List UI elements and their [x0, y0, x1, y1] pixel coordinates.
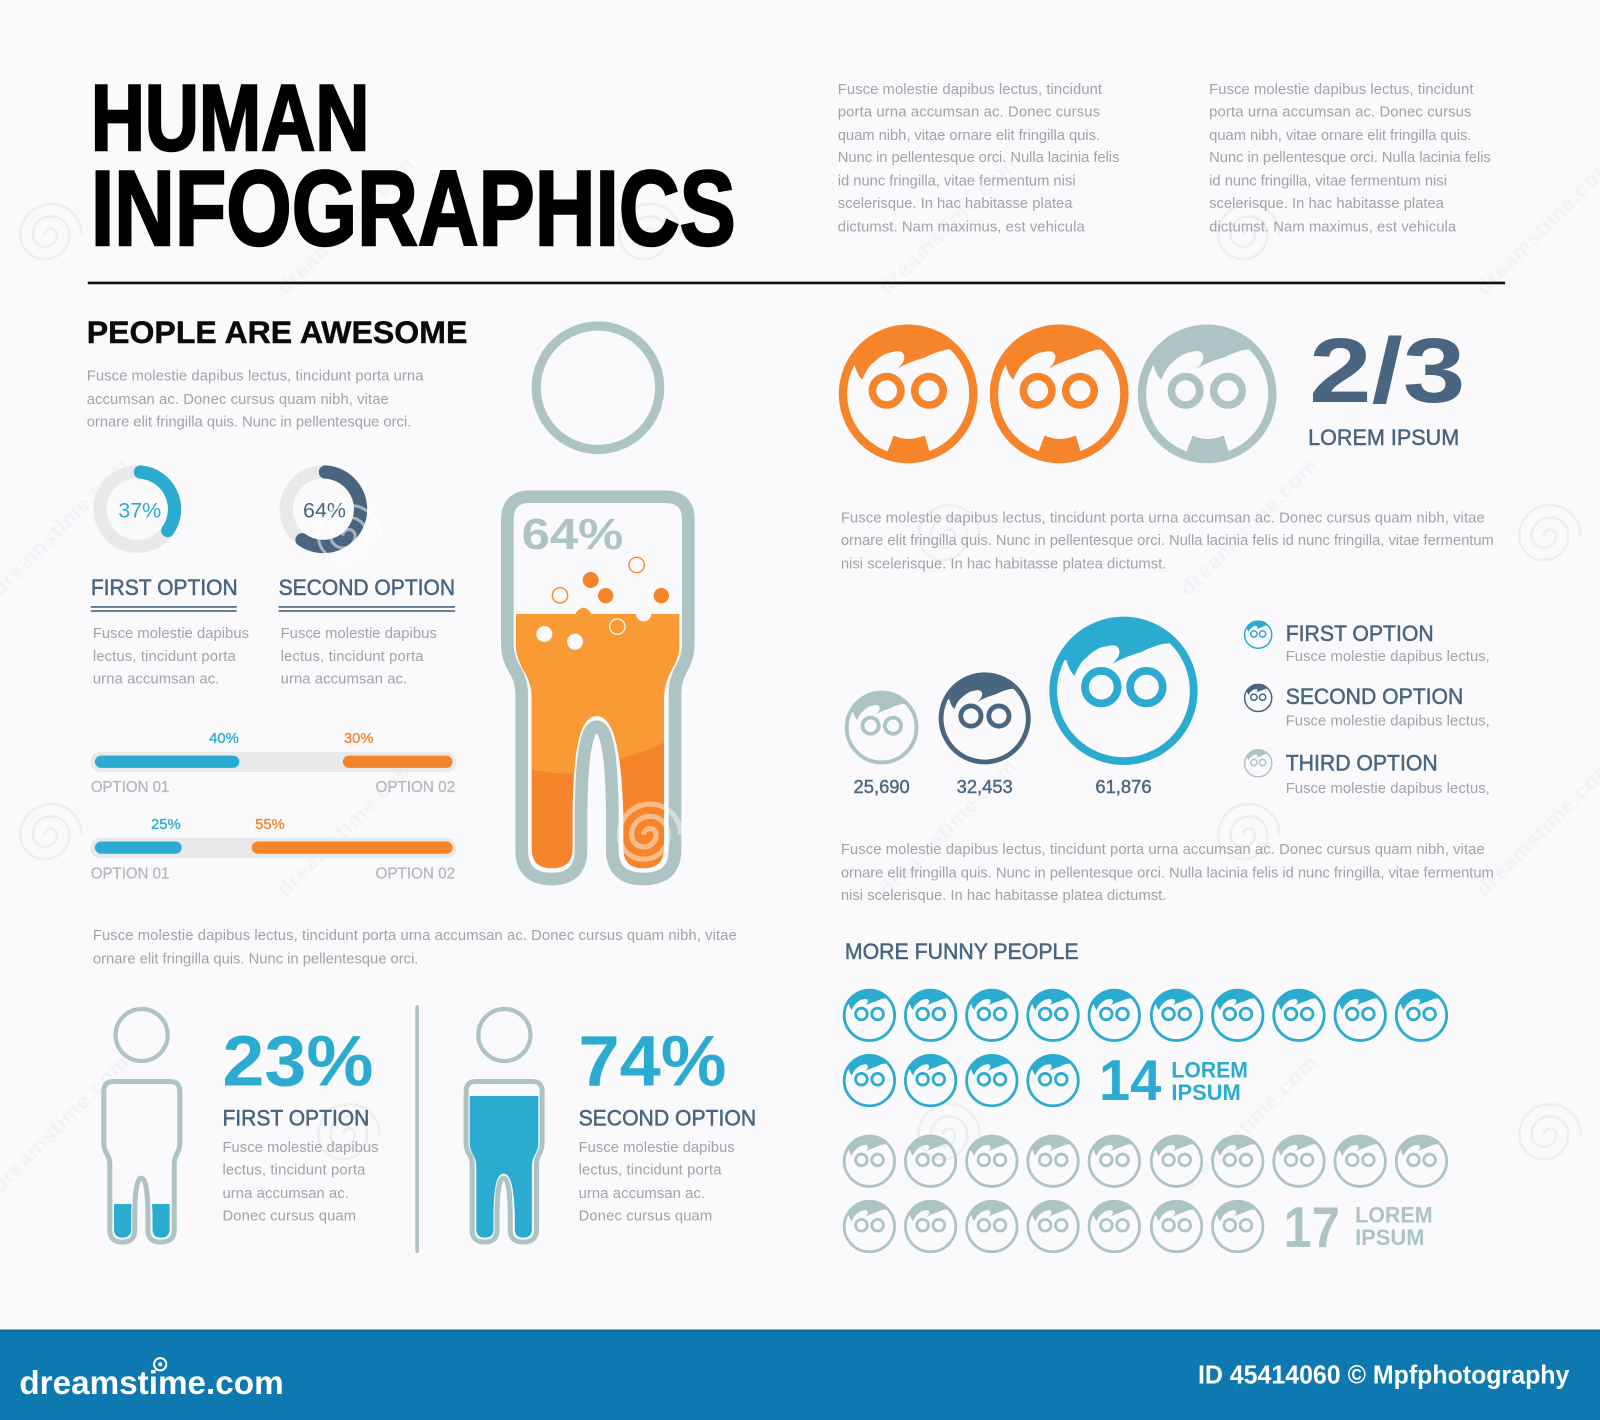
stat: 2/3 lorem ipsum: 2/3: [1309, 320, 1465, 422]
stat: 74% second option: Donec cursus quam: [579, 1208, 712, 1224]
legend: Fusce molestie dapibus lectus,: [1286, 781, 1490, 797]
legend: Fusce molestie dapibus lectus,: [1286, 714, 1490, 730]
small person 23%: [104, 1009, 180, 1242]
legend: [1245, 621, 1490, 797]
right text block 1: [841, 510, 1494, 572]
right text block 2: Fusce molestie dapibus lectus, tincidunt porta urna accumsan ac. Donec cursus quam nibh, vitae: [841, 842, 1485, 858]
bar chart 2: OPTION 02: [376, 866, 455, 883]
people text block: [87, 369, 424, 431]
stat: 14 lorem ipsum: IPSUM: [1171, 1080, 1241, 1105]
intro text column 1: id nunc fringilla, vitae fermentum nisi: [838, 174, 1076, 190]
intro text column 1: [838, 82, 1119, 236]
stat: 17 lorem ipsum: [1284, 1196, 1433, 1260]
bubble faces with counts: 32,453: [957, 776, 1013, 797]
bubble faces with counts: 25,690: [854, 776, 910, 797]
second option block: SECOND OPTION: [279, 575, 455, 600]
bar chart 1: [91, 731, 456, 796]
middle text block: [93, 928, 737, 967]
stat: 23% first option: FIRST OPTION: [222, 1106, 369, 1131]
stat: 23% first option: urna accumsan ac.: [222, 1186, 349, 1202]
intro text column 2: id nunc fringilla, vitae fermentum nisi: [1209, 174, 1447, 190]
second option block: Fusce molestie dapibus: [281, 626, 437, 642]
stat: 74% second option: Fusce molestie dapibus: [579, 1140, 735, 1156]
heading: more funny people: MORE FUNNY PEOPLE: [845, 939, 1079, 964]
intro text column 1: Nunc in pellentesque orci. Nulla lacinia felis: [838, 150, 1119, 166]
legend: Fusce molestie dapibus lectus,: [1286, 649, 1490, 665]
bar chart 2: 25%: [151, 817, 181, 833]
owl faces 2 of 3: [843, 328, 1272, 461]
bar chart 2: [91, 817, 456, 883]
first option block: FIRST OPTION: [91, 575, 238, 600]
stat: 23% first option: 23%: [222, 1022, 373, 1102]
stat: 23% first option: Donec cursus quam: [222, 1208, 356, 1224]
intro text column 1: dictumst. Nam maximus, est vehicula: [838, 220, 1085, 236]
second option block: urna accumsan ac.: [281, 672, 407, 688]
gray faces: 17: [844, 1136, 1447, 1252]
footer bar: ID 45414060 © Mpfphotography: [1198, 1362, 1570, 1390]
stat: 14 lorem ipsum: [1099, 1049, 1248, 1113]
middle text block: ornare elit fringilla quis. Nunc in pellentesque orci.: [93, 951, 418, 967]
first option block: [91, 575, 249, 688]
intro text column 2: Nunc in pellentesque orci. Nulla lacinia felis: [1209, 150, 1491, 166]
blue faces: 14: [844, 990, 1447, 1106]
stat: 17 lorem ipsum: 17: [1284, 1196, 1340, 1260]
watermark spirals and text: dreamstime.com: [874, 152, 1022, 299]
stat: 74% second option: 74%: [579, 1022, 727, 1102]
bubble faces with counts: [847, 621, 1194, 797]
bar chart 1: 30%: [344, 731, 373, 747]
people text block: Fusce molestie dapibus lectus, tincidunt porta urna: [87, 369, 424, 385]
legend: SECOND OPTION: [1286, 684, 1463, 709]
bubble faces with counts: 61,876: [1095, 776, 1152, 797]
intro text column 2: scelerisque. In hac habitasse platea: [1209, 196, 1445, 212]
footer bar: [0, 1330, 1600, 1420]
intro text column 1: Fusce molestie dapibus lectus, tincidunt: [838, 82, 1102, 98]
first option block: Fusce molestie dapibus: [93, 626, 249, 642]
donut: first option 37%: [100, 472, 175, 546]
intro text column 2: [1209, 82, 1491, 236]
intro text column 2: quam nibh, vitae ornare elit fringilla quis.: [1209, 128, 1471, 144]
watermark spirals and text: dreamstime.com: [272, 152, 420, 299]
right text block 2: [841, 842, 1494, 904]
small person 74%: [466, 1009, 542, 1242]
right text block 1: ornare elit fringilla quis. Nunc in pellentesque orci. Nulla lacinia felis id nunc fringilla, vitae fermentum: [841, 533, 1494, 549]
donut: second option 64%: 64%: [303, 498, 346, 522]
watermark spirals and text: [0, 152, 1600, 1197]
watermark spirals and text: dreamstime.com: [1175, 453, 1323, 600]
first option block: lectus, tincidunt porta: [93, 649, 236, 665]
bar chart 2: OPTION 01: [91, 866, 169, 883]
stat: 2/3 lorem ipsum: LOREM IPSUM: [1308, 425, 1459, 450]
stat: 74% second option: SECOND OPTION: [579, 1106, 756, 1131]
bar chart 1: 40%: [209, 731, 239, 747]
right text block 2: ornare elit fringilla quis. Nunc in pellentesque orci. Nulla lacinia felis id nunc fringilla, vitae fermentum: [841, 866, 1494, 882]
legend: FIRST OPTION: [1286, 621, 1434, 646]
stat: 23% first option: lectus, tincidunt porta: [222, 1162, 366, 1178]
legend: THIRD OPTION: [1286, 750, 1438, 775]
watermark spirals and text: dreamstime.com: [874, 754, 1022, 901]
stat: 17 lorem ipsum: IPSUM: [1355, 1225, 1424, 1250]
bar chart 1: OPTION 02: [376, 779, 455, 796]
stat: 14 lorem ipsum: LOREM: [1171, 1058, 1248, 1083]
intro text column 2: Fusce molestie dapibus lectus, tincidunt: [1209, 82, 1473, 98]
watermark spirals and text: dreamstime.com: [272, 754, 420, 901]
title: [91, 65, 736, 268]
footer bar: dreamstime.com: [19, 1365, 284, 1402]
large person figure 64%: [507, 326, 688, 879]
first option block: urna accumsan ac.: [93, 672, 219, 688]
second option block: [279, 575, 455, 688]
people text block: ornare elit fringilla quis. Nunc in pellentesque orci.: [87, 415, 411, 431]
title: HUMAN: [91, 65, 369, 170]
intro text column 1: quam nibh, vitae ornare elit fringilla quis.: [838, 128, 1100, 144]
donut: second option 64%: [286, 472, 380, 560]
donut: first option 37%: 37%: [118, 498, 161, 522]
bar chart 2: 55%: [255, 817, 285, 833]
stat: 23% first option: Fusce molestie dapibus: [222, 1140, 379, 1156]
right text block 2: nisi scelerisque. In hac habitasse platea dictumst.: [841, 888, 1166, 904]
second option block: lectus, tincidunt porta: [281, 649, 424, 665]
stat: 14 lorem ipsum: 14: [1099, 1049, 1161, 1113]
right text block 1: nisi scelerisque. In hac habitasse platea dictumst.: [841, 556, 1166, 572]
stat: 74% second option: [579, 1022, 756, 1224]
large person figure 64%: 64%: [522, 510, 623, 559]
intro text column 1: porta urna accumsan ac. Donec cursus: [838, 104, 1100, 120]
stat: 23% first option: [222, 1022, 379, 1224]
watermark spirals and text: dreamstime.com: [1175, 1050, 1323, 1197]
stat: 2/3 lorem ipsum: [1308, 320, 1465, 450]
stat: 74% second option: lectus, tincidunt porta: [579, 1162, 722, 1178]
heading: people are awesome: PEOPLE ARE AWESOME: [87, 314, 467, 350]
stat: 17 lorem ipsum: LOREM: [1355, 1202, 1433, 1227]
right text block 1: Fusce molestie dapibus lectus, tincidunt porta urna accumsan ac. Donec cursus quam nibh, vitae: [841, 510, 1485, 526]
intro text column 2: porta urna accumsan ac. Donec cursus: [1209, 104, 1471, 120]
people text block: accumsan ac. Donec cursus quam nibh, vitae: [87, 392, 389, 408]
stat: 74% second option: urna accumsan ac.: [579, 1186, 705, 1202]
intro text column 2: dictumst. Nam maximus, est vehicula: [1209, 220, 1457, 236]
title: INFOGRAPHICS: [91, 148, 736, 268]
intro text column 1: scelerisque. In hac habitasse platea: [838, 196, 1073, 212]
middle text block: Fusce molestie dapibus lectus, tincidunt porta urna accumsan ac. Donec cursus quam nibh, vitae: [93, 928, 737, 944]
bar chart 1: OPTION 01: [91, 779, 169, 796]
